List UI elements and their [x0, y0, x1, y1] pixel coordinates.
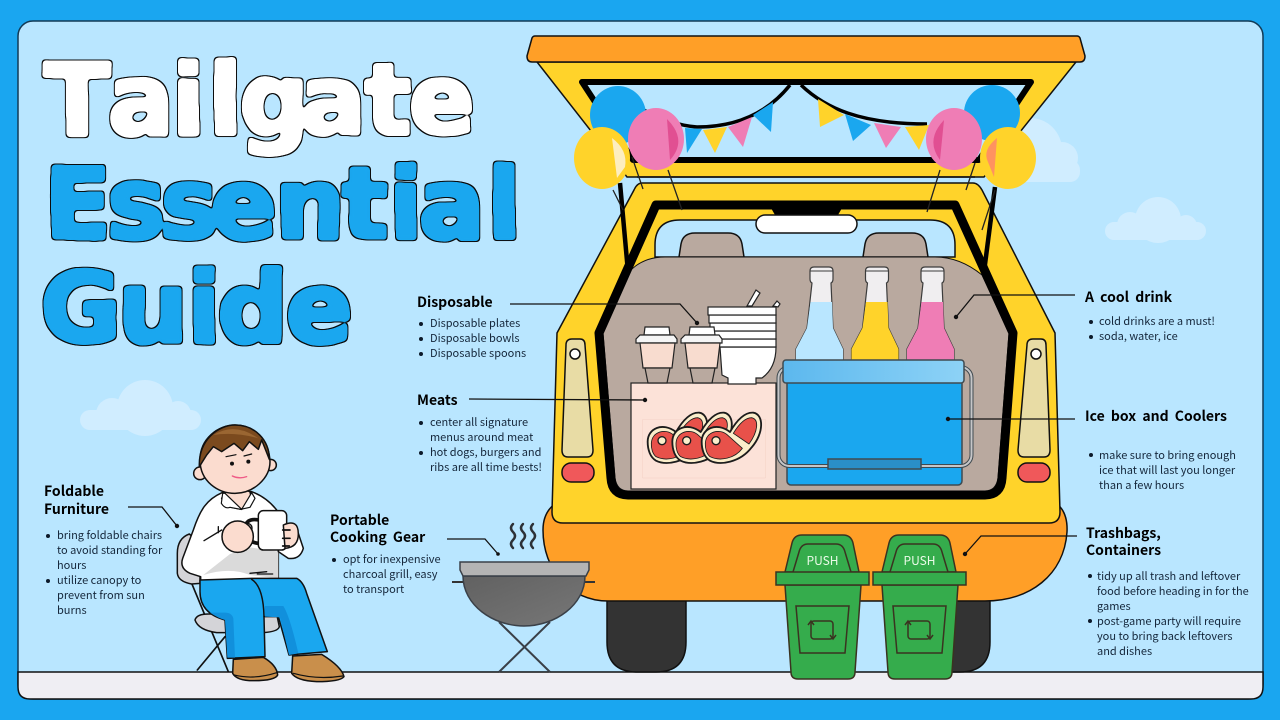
text block: meats: Meats [417, 390, 458, 410]
coffee cup left [636, 327, 677, 383]
text block: ice box and coolers: make sure to bring enough [1099, 447, 1236, 463]
text block: disposable: Disposable plates [430, 315, 520, 331]
ground strip [18, 672, 1263, 699]
text block: foldable furniture: to avoid standing for [57, 542, 162, 558]
text block: ice box and coolers: Ice box and Coolers [1085, 406, 1227, 426]
text block: ice box and coolers [1085, 406, 1236, 493]
trash bin right [873, 535, 966, 679]
text block: foldable furniture: Furniture [44, 499, 109, 519]
text block: trashbags, containers [1086, 523, 1249, 659]
text block: trashbags, containers: food before heading in for the [1097, 583, 1249, 599]
text block: meats [417, 390, 542, 475]
trunk opening [599, 205, 1013, 495]
text block: a cool drink: cold drinks are a must! [1099, 313, 1215, 329]
text block: a cool drink: A cool drink [1085, 286, 1172, 306]
trash bin left: PUSH [806, 552, 839, 569]
text block: trashbags, containers: tidy up all trash and leftover [1097, 568, 1240, 584]
car bumper [543, 503, 1067, 601]
trunk interior [603, 257, 1009, 491]
text block: foldable furniture: prevent from sun [57, 587, 145, 603]
text block: disposable: Disposable bowls [430, 330, 520, 346]
leader line: cool drink [954, 295, 1075, 319]
tailgate hatch [537, 62, 1076, 177]
text block: trashbags, containers: you to bring back leftovers [1097, 628, 1233, 644]
rear window [655, 220, 955, 257]
cloud: left [80, 380, 201, 436]
coffee cup right [681, 327, 722, 383]
seat headrest left [679, 233, 744, 257]
text block: foldable furniture: bring foldable chairs [57, 527, 162, 543]
balloons right [926, 85, 1036, 230]
tail light left [562, 339, 594, 482]
text block: portable cooking gear: Portable [330, 510, 389, 530]
roof spoiler [527, 36, 1085, 62]
charcoal grill [452, 562, 595, 672]
text block: foldable furniture: Foldable [44, 481, 104, 501]
text block: trashbags, containers: Containers [1086, 540, 1161, 560]
text block: ice box and coolers: than a few hours [1099, 477, 1184, 493]
trash bin left [776, 535, 869, 679]
smoke [511, 524, 535, 548]
title: Guide [41, 252, 352, 366]
bottle: lemon soda [852, 267, 898, 362]
rear-view mirror [756, 208, 857, 233]
cloud: upper right [998, 118, 1080, 182]
text block: disposable: Disposable [417, 292, 493, 312]
text block: a cool drink: soda, water, ice [1099, 328, 1178, 344]
text block: ice box and coolers: ice that will last you longer [1099, 462, 1235, 478]
text block: foldable furniture: utilize canopy to [57, 572, 141, 588]
car wheel right [920, 595, 990, 672]
text block: portable cooking gear: charcoal grill, easy [343, 566, 438, 582]
text block: a cool drink [1085, 286, 1215, 344]
text block: disposable: Disposable spoons [430, 345, 526, 361]
text block: trashbags, containers: Trashbags, [1086, 523, 1161, 543]
car body [552, 183, 1060, 523]
text block: foldable furniture [44, 481, 162, 618]
cloud: right [1105, 197, 1206, 243]
text block: meats: hot dogs, burgers and [430, 444, 541, 460]
text block: portable cooking gear: Cooking Gear [330, 527, 425, 547]
text block: trashbags, containers: games [1097, 598, 1131, 614]
trash bin right: PUSH [903, 552, 936, 569]
car wheel left [607, 595, 686, 672]
text block: foldable furniture: hours [57, 557, 86, 573]
seat headrest right [863, 233, 928, 257]
text block: portable cooking gear: opt for inexpensive [343, 551, 441, 567]
title: Tailgate [44, 44, 475, 158]
tail light right [1018, 339, 1050, 482]
person on folding chair [177, 425, 344, 682]
title [41, 44, 521, 366]
leader line: cooking gear [447, 539, 500, 556]
leader line: ice box [946, 417, 1075, 421]
ice box cooler [778, 360, 972, 485]
leader line: furniture [128, 507, 179, 528]
text block: trashbags, containers: post-game party will require [1097, 613, 1241, 629]
stacked bowls [708, 290, 780, 384]
balloons left [574, 86, 684, 210]
text block: portable cooking gear [330, 510, 441, 597]
text block: portable cooking gear: to transport [343, 581, 404, 597]
text block: disposable [417, 292, 526, 361]
bunting flags [640, 85, 929, 153]
leader line: disposable [510, 304, 699, 325]
text block: meats: menus around meat [430, 429, 533, 445]
leader line: meats [469, 398, 647, 402]
leader line: trashbags [963, 536, 1077, 556]
text block: meats: ribs are all time bests! [430, 459, 542, 475]
meat box [631, 383, 776, 489]
steaks [642, 413, 766, 478]
text block: meats: center all signature [430, 414, 528, 430]
text block: foldable furniture: burns [57, 602, 87, 618]
trunk frame [599, 205, 1013, 495]
text block: trashbags, containers: and dishes [1097, 643, 1152, 659]
hatch support struts [620, 183, 995, 272]
bottle: water [796, 267, 843, 362]
bottle: berry soda [907, 267, 954, 362]
title: Essential [45, 148, 521, 262]
